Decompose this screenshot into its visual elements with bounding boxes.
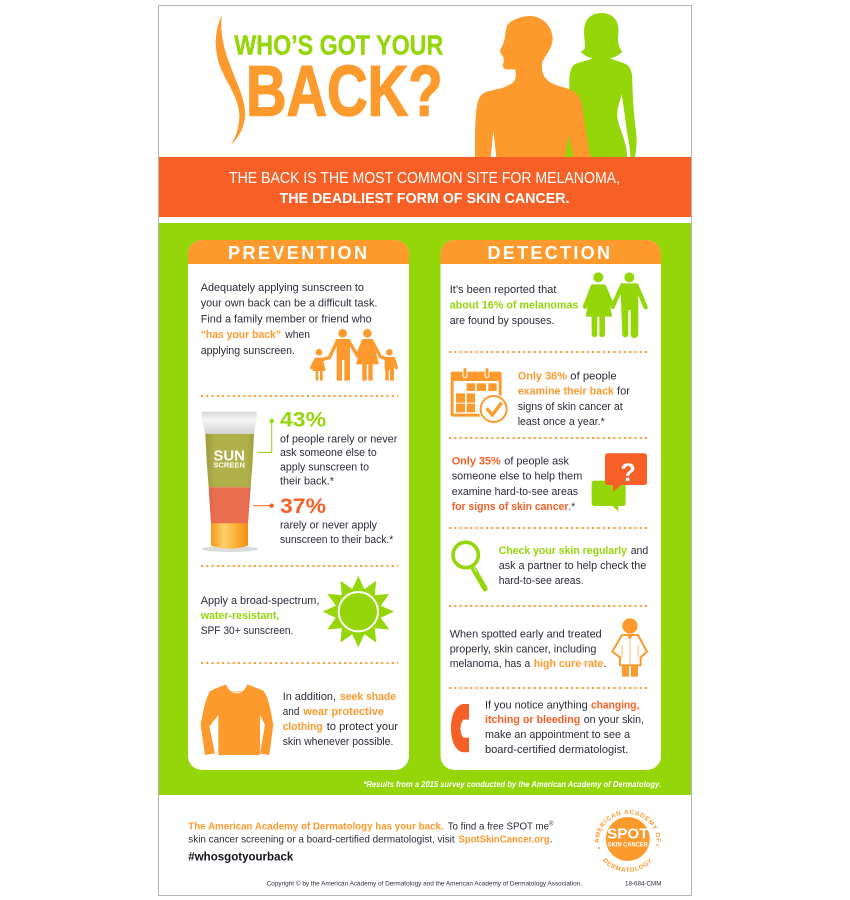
text: broad spectrum: SPF 30+ sunscreen. xyxy=(201,625,293,637)
text: ask someone else: Only 35% xyxy=(452,456,501,468)
text: ask someone else: for signs of skin cancer xyxy=(452,501,569,513)
tube label: SUN xyxy=(213,448,245,464)
icon: sunscreen tube xyxy=(202,412,258,552)
text: examine back: least once a year.* xyxy=(518,416,605,428)
text: examine back: for xyxy=(617,386,630,398)
icon: speech bubbles xyxy=(592,453,647,511)
stat: 37 percent xyxy=(280,495,394,546)
text: see a dermatologist: on your skin, xyxy=(584,714,644,726)
text: ask someone else xyxy=(452,456,582,513)
icon: calendar with check xyxy=(451,368,509,424)
logo: spot skin cancer: SKIN CANCER xyxy=(608,843,648,849)
text: ask someone else: .* xyxy=(568,501,576,513)
text: ask someone else: someone else to help them xyxy=(452,470,582,482)
icon: back curve swoosh xyxy=(216,15,245,145)
text: applying sunscreen: your own back can be a difficult task. xyxy=(201,298,377,310)
text: seek shade: wear protective xyxy=(302,706,384,718)
stat: 43 percent: their back.* xyxy=(280,476,335,488)
divider xyxy=(449,605,648,607)
icon: family xyxy=(312,329,396,381)
green panel background xyxy=(159,223,691,795)
text: check your skin xyxy=(499,545,648,587)
text: ask someone else: examine hard-to-see areas xyxy=(452,486,578,498)
footer text: ® xyxy=(549,820,554,828)
footer text: skin cancer screening or a board-certified dermatologist, visit xyxy=(188,834,455,846)
text: see a dermatologist: make an appointment to see a xyxy=(485,729,631,741)
stat: 37 percent: 37% xyxy=(280,495,326,518)
divider xyxy=(449,437,648,439)
text: seek shade: skin whenever possible. xyxy=(283,736,393,748)
text: examine back: Only 36% xyxy=(518,370,567,382)
banner xyxy=(159,157,691,217)
text: see a dermatologist: If you notice anything xyxy=(485,700,588,712)
text: cure rate: When spotted early and treated xyxy=(450,628,602,640)
footer text: The American Academy of Dermatology has your back. xyxy=(188,821,444,833)
text: seek shade: and xyxy=(283,706,299,718)
divider xyxy=(449,351,648,353)
divider xyxy=(449,687,648,689)
stat: 43 percent xyxy=(280,408,398,488)
text: broad spectrum: Apply a broad-spectrum, xyxy=(201,595,319,607)
logo: spot skin cancer: AMERICAN ACADEMY OF xyxy=(594,810,662,843)
header: title and silhouettes xyxy=(216,13,637,158)
panel: prevention xyxy=(188,240,409,770)
title: back: BACK? xyxy=(246,52,442,132)
banner line two: THE DEADLIEST FORM OF SKIN CANCER. xyxy=(280,190,570,207)
text: cure rate xyxy=(450,628,606,670)
text: see a dermatologist: itching or bleeding xyxy=(485,714,580,726)
panel: detection xyxy=(440,240,661,770)
text: applying sunscreen: “has your back” xyxy=(201,329,281,341)
text: spouses xyxy=(450,284,578,327)
text: cure rate: high cure rate xyxy=(534,658,603,670)
text: applying sunscreen: when xyxy=(284,329,310,341)
text: applying sunscreen: Find a family member or friend who xyxy=(201,314,372,326)
stat: 43 percent: of people rarely or never xyxy=(280,434,398,446)
tube label: SCREEN xyxy=(213,461,245,470)
icon: woman silhouette xyxy=(565,13,637,158)
hashtag: #whosgotyourback xyxy=(188,850,294,864)
prevention card xyxy=(188,240,409,770)
stat: 37 percent: sunscreen to their back.* xyxy=(280,534,394,546)
text: cure rate: . xyxy=(603,658,606,670)
text: spouses: about 16% of melanomas xyxy=(450,300,578,312)
document code: 18-684-CMM xyxy=(625,880,661,888)
divider xyxy=(201,395,398,397)
text: seek shade: to protect your xyxy=(327,721,398,733)
text: examine back: of people xyxy=(570,370,617,382)
icon: telephone xyxy=(451,704,469,752)
text: check your skin: Check your skin regularly xyxy=(499,545,628,557)
text: see a dermatologist: board-certified dermatologist. xyxy=(485,744,628,756)
prevention heading: PREVENTION xyxy=(228,243,367,263)
icon: magnifying glass xyxy=(453,542,485,589)
text: see a dermatologist xyxy=(485,700,644,756)
callout lines xyxy=(253,419,274,508)
icon: couple xyxy=(585,272,646,338)
prevention heading xyxy=(188,240,409,264)
icon: doctor xyxy=(612,618,647,677)
footer text: To find a free SPOT me xyxy=(448,821,549,833)
text: seek shade xyxy=(283,691,398,748)
woman arm gap xyxy=(617,94,630,158)
logo: spot skin cancer xyxy=(594,810,662,872)
title: who's got your: WHO’S GOT YOUR xyxy=(234,30,443,61)
detection heading: DETECTION xyxy=(488,243,610,263)
stat: 43 percent: apply sunscreen to xyxy=(280,462,369,474)
text: check your skin: ask a partner to help check the xyxy=(499,560,646,572)
footer text xyxy=(188,820,554,864)
icon: sun xyxy=(323,576,394,647)
divider xyxy=(201,662,398,664)
detection heading xyxy=(440,240,661,264)
text: applying sunscreen: Adequately applying sunscreen to xyxy=(201,282,364,294)
stat: 43 percent: ask someone else to xyxy=(280,447,377,459)
text: cure rate: melanoma, has a xyxy=(450,658,531,670)
icon: man silhouette xyxy=(475,16,591,158)
text: ask someone else: of people ask xyxy=(504,456,569,468)
text: examine back: examine their back xyxy=(518,386,615,398)
stat: 37 percent: rarely or never apply xyxy=(280,520,377,532)
text: applying sunscreen xyxy=(201,282,377,357)
text: spouses: are found by spouses. xyxy=(450,315,554,327)
logo: spot skin cancer: DERMATOLOGY xyxy=(603,858,652,872)
text: broad spectrum xyxy=(200,595,319,637)
icon: speech bubbles: ? xyxy=(620,459,636,487)
text: seek shade: seek shade xyxy=(340,691,396,703)
text: seek shade: clothing xyxy=(283,721,323,733)
poster frame xyxy=(158,6,692,896)
divider xyxy=(201,565,398,567)
text: spouses: It’s been reported that xyxy=(450,284,557,296)
stat: 43 percent: 43% xyxy=(280,408,326,432)
text: check your skin: and xyxy=(631,545,648,557)
logo: spot skin cancer: SPOT xyxy=(607,826,649,842)
text: applying sunscreen: applying sunscreen. xyxy=(201,345,295,357)
text: seek shade: In addition, xyxy=(283,691,336,703)
banner line one: THE BACK IS THE MOST COMMON SITE FOR MELANOMA, xyxy=(229,170,620,187)
text: cure rate: properly, skin cancer, including xyxy=(450,644,596,656)
footer text: SpotSkinCancer.org xyxy=(458,834,550,846)
text: check your skin: hard-to-see areas. xyxy=(499,575,584,587)
detection card xyxy=(440,240,661,770)
footer text: . xyxy=(550,834,553,846)
text: examine back xyxy=(518,370,630,428)
footnote: *Results from a 2015 survey conducted by the American Academy of Dermatology. xyxy=(364,780,661,789)
divider xyxy=(449,527,648,529)
copyright: Copyright © by the American Academy of Dermatology and the American Academy of Dermatology Association. xyxy=(267,880,582,888)
text: broad spectrum: water-resistant, xyxy=(200,610,279,622)
text: see a dermatologist: changing, xyxy=(591,700,639,712)
text: examine back: signs of skin cancer at xyxy=(518,401,624,413)
icon: long sleeve shirt xyxy=(201,684,273,755)
